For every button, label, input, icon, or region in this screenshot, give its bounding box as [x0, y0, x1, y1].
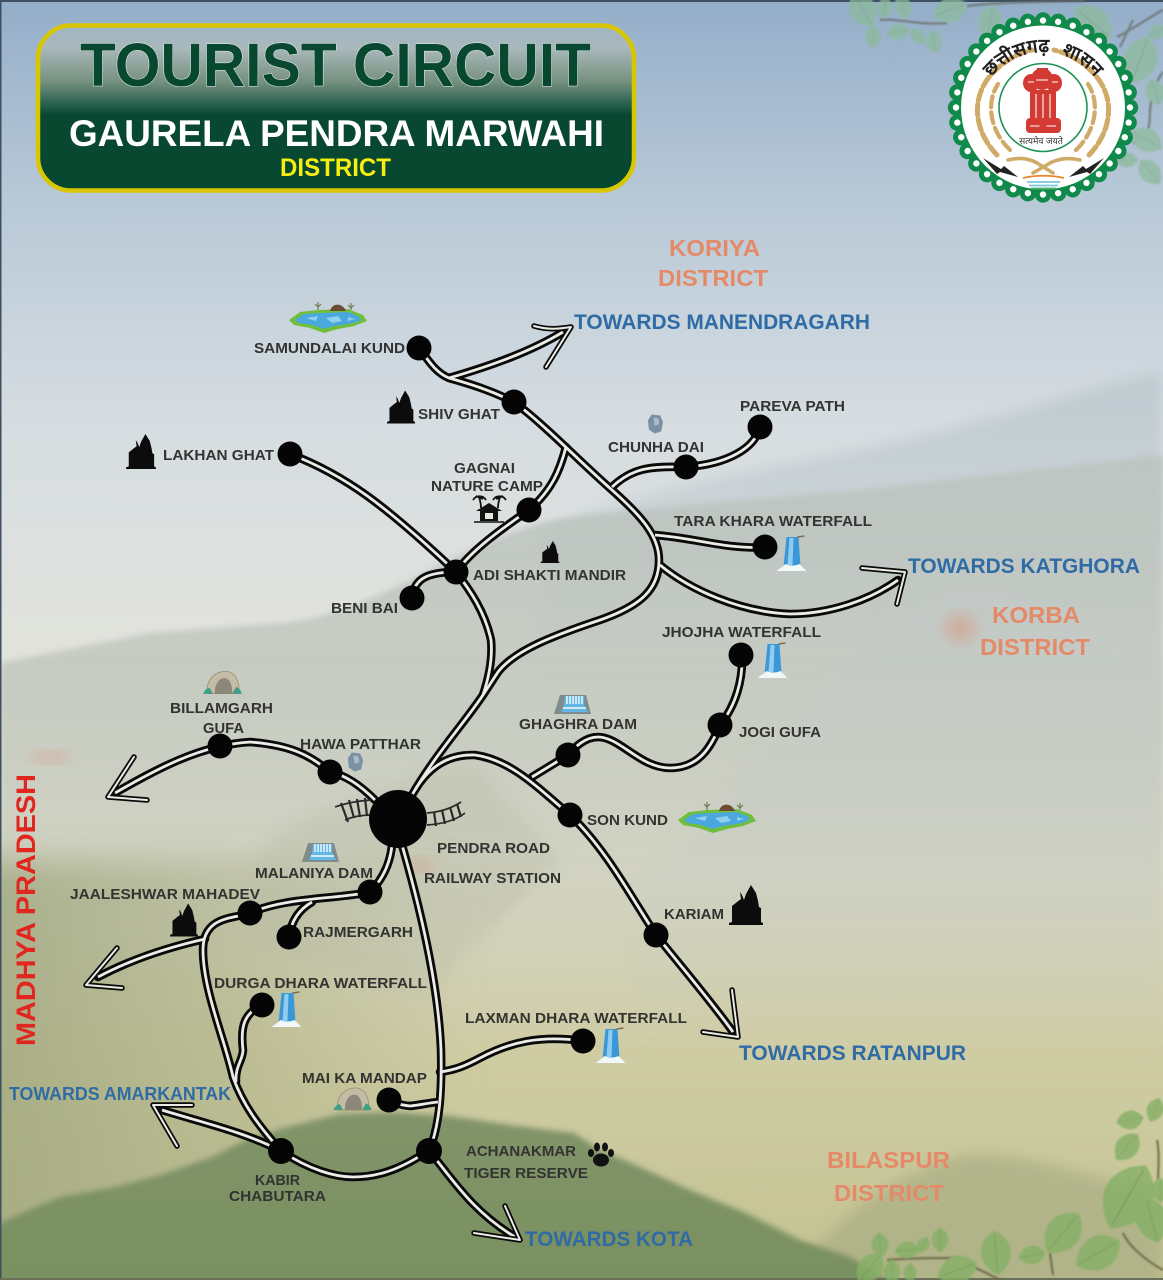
emblem: lion capital	[1023, 68, 1062, 133]
label: towards Kota: TOWARDS KOTA	[525, 1228, 693, 1251]
label: Kabir Chabutara: CHABUTARA	[229, 1188, 326, 1205]
label: Lakhan Ghat: LAKHAN GHAT	[163, 447, 274, 464]
icon: dam Malaniya	[302, 843, 339, 862]
icon: waterfall Laxman Dhara	[596, 1028, 626, 1063]
icon: temple Kariam	[729, 885, 763, 925]
label: Adi Shakti Mandir: ADI SHAKTI MANDIR	[473, 567, 626, 584]
label: Gagnai Nature Camp: GAGNAI	[454, 460, 515, 477]
arrow: towards Amarkantak	[153, 1105, 192, 1146]
label: Billamgarh Gufa	[170, 700, 273, 737]
icon: temple Shiv Ghat	[387, 391, 415, 423]
label: Ghaghra Dam: GHAGHRA DAM	[519, 716, 637, 733]
title panel	[38, 26, 634, 190]
label: Jogi Gufa: JOGI GUFA	[739, 724, 821, 741]
icon: waterfall Jhojha	[758, 643, 788, 678]
label: towards Katghora: TOWARDS KATGHORA	[908, 555, 1140, 578]
arrow: towards Ratanpur	[703, 990, 738, 1037]
label: towards Manendragarh: TOWARDS MANENDRAGARH	[574, 311, 870, 334]
label: Gagnai Nature Camp: NATURE CAMP	[431, 478, 543, 495]
label: Pareva Path: PAREVA PATH	[740, 398, 845, 415]
label: Malaniya Dam: MALANIYA DAM	[255, 865, 373, 882]
emblem title arc: छत्तीसगढ़ शासन	[982, 40, 1104, 76]
label: Pendra Road Railway Station	[424, 840, 561, 887]
label: Bilaspur District: BILASPUR	[827, 1147, 950, 1173]
icon: waterfall Durga Dhara	[272, 992, 302, 1027]
arrow: towards Manendragarh	[534, 326, 571, 367]
label: Son Kund: SON KUND	[587, 812, 668, 829]
arrow: towards Katghora	[862, 568, 905, 604]
label: Achanakmar Tiger Reserve: TIGER RESERVE	[464, 1165, 588, 1182]
label: Jhojha Waterfall: JHOJHA WATERFALL	[662, 624, 821, 641]
label: Billamgarh Gufa: BILLAMGARH	[170, 700, 273, 717]
emblem river bands	[1023, 176, 1064, 188]
icon: stone Chunha Dai	[648, 415, 663, 433]
label: Madhya Pradesh: MADHYA PRADESH	[11, 774, 41, 1046]
arrow: west from Jaaleshwar	[86, 948, 122, 988]
icon: stone Hawa Patthar	[348, 753, 363, 771]
label: Achanakmar Tiger Reserve	[464, 1143, 588, 1182]
label: Gagnai Nature Camp	[431, 460, 543, 495]
icon: cave Mai Ka Mandap	[333, 1088, 372, 1110]
label: Beni Bai: BENI BAI	[331, 600, 398, 617]
label: Laxman Dhara Waterfall: LAXMAN DHARA WATERFALL	[465, 1010, 687, 1027]
label: Rajmergarh: RAJMERGARH	[303, 924, 413, 941]
subtitle: district: DISTRICT	[280, 154, 391, 182]
nodes	[208, 336, 778, 1164]
emblem lightning bolts	[983, 158, 1104, 177]
label: Mai Ka Mandap: MAI KA MANDAP	[302, 1070, 427, 1087]
label: Bilaspur District: DISTRICT	[834, 1180, 944, 1206]
icon: railway track left	[335, 798, 372, 822]
label: Chunha Dai: CHUNHA DAI	[608, 439, 704, 456]
label: Korba District: KORBA	[992, 602, 1080, 628]
icon: dam Ghaghra	[554, 695, 591, 714]
icon: temple Lakhan Ghat	[126, 434, 156, 469]
subtitle: district name: GAURELA PENDRA MARWAHI	[69, 113, 604, 154]
decorative leaves top right	[842, 0, 1163, 190]
label: Samundalai Kund: SAMUNDALAI KUND	[254, 340, 405, 357]
label: Shiv Ghat: SHIV GHAT	[418, 406, 500, 423]
label: Hawa Patthar: HAWA PATTHAR	[300, 736, 421, 753]
label: Kariam: KARIAM	[664, 906, 724, 923]
label: Koriya District: KORIYA	[669, 235, 760, 261]
label: Durga Dhara Waterfall: DURGA DHARA WATERFALL	[214, 975, 427, 992]
label: Bilaspur District	[827, 1147, 950, 1206]
label: Pendra Road Railway Station: PENDRA ROAD	[437, 840, 550, 857]
label: Korba District	[980, 602, 1090, 660]
decorative leaves bottom right	[849, 1095, 1163, 1280]
icon: railway track right	[427, 802, 465, 826]
arrow: west from Billamgarh	[108, 757, 147, 800]
icon: cave Billamgarh	[203, 671, 242, 694]
emblem motto: सत्यमेव जयते	[1019, 135, 1064, 146]
emblem wreath	[977, 50, 1109, 173]
title: tourist circuit: TOURIST CIRCUIT	[80, 31, 591, 99]
label: Koriya District	[658, 235, 768, 291]
label: towards Ratanpur: TOWARDS RATANPUR	[739, 1042, 966, 1065]
label: Kabir Chabutara: KABIR	[255, 1172, 300, 1189]
icon: hut Gagnai	[473, 496, 506, 522]
label: Koriya District: DISTRICT	[658, 265, 768, 291]
arrow: towards Kota	[474, 1206, 520, 1240]
icon: paw print	[588, 1142, 614, 1166]
label: Billamgarh Gufa: GUFA	[203, 720, 244, 737]
icon: waterfall Tara Khara	[776, 536, 806, 571]
road network	[98, 332, 898, 1237]
icon: temple Adi Shakti	[541, 541, 559, 563]
label: towards Amarkantak: TOWARDS AMARKANTAK	[9, 1084, 231, 1104]
icon: lake Son Kund	[678, 802, 756, 833]
label: Pendra Road Railway Station: RAILWAY STATION	[424, 870, 561, 887]
label: Korba District: DISTRICT	[980, 634, 1090, 660]
emblem: Chhattisgarh government seal	[948, 12, 1138, 203]
label: Tara Khara Waterfall: TARA KHARA WATERFALL	[674, 513, 872, 530]
icon: temple Jaaleshwar	[170, 904, 198, 936]
label: Kabir Chabutara	[229, 1172, 326, 1205]
icon: lake Samundalai	[289, 302, 367, 333]
label: Jaaleshwar Mahadev: JAALESHWAR MAHADEV	[70, 886, 260, 903]
label: Achanakmar Tiger Reserve: ACHANAKMAR	[466, 1143, 576, 1160]
